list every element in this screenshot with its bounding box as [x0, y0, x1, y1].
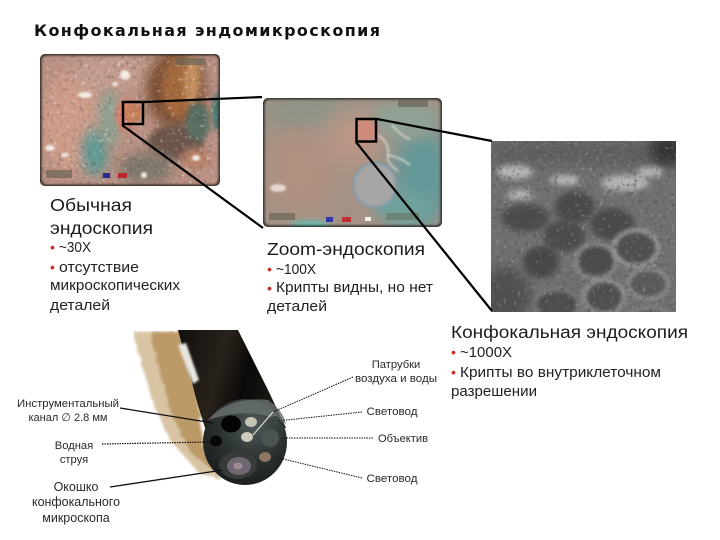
text block: confocal endoscopy: • — [451, 344, 456, 360]
label: air and water nozzles: воздуха и воды — [355, 373, 437, 385]
text block: standard endoscopy: • — [50, 239, 55, 255]
text block: confocal endoscopy: Крипты во внутриклеточном — [460, 365, 661, 381]
label: confocal window: микроскопа — [42, 511, 110, 525]
photo: endoscope tip — [133, 330, 287, 485]
text block: zoom endoscopy: • — [267, 280, 272, 296]
text block: zoom endoscopy: деталей — [267, 299, 327, 315]
text block: zoom endoscopy: Zoom-эндоскопия — [267, 239, 425, 259]
text block: standard endoscopy: микроскопических — [50, 278, 181, 294]
text block: standard endoscopy: отсутствие — [59, 260, 139, 276]
text block: zoom endoscopy: • — [267, 261, 272, 277]
label: water jet — [55, 440, 93, 466]
text block: standard endoscopy — [50, 195, 181, 314]
text block: standard endoscopy: ~30X — [59, 240, 91, 256]
label: water jet: Водная — [55, 440, 93, 452]
label: air and water nozzles: Патрубки — [372, 359, 420, 371]
label: air and water nozzles — [355, 359, 437, 385]
text block: standard endoscopy: Обычная — [50, 195, 132, 215]
light guides — [270, 416, 280, 424]
label: confocal window — [32, 480, 120, 525]
endoscope face — [203, 399, 287, 485]
text block: zoom endoscopy: Крипты видны, но нет — [276, 280, 433, 296]
instrument channel — [221, 416, 241, 432]
image: confocal micrograph — [491, 141, 676, 312]
air and water nozzles — [245, 417, 257, 427]
endoscope tube — [178, 330, 286, 428]
title: Конфокальная эндомикроскопия — [34, 21, 380, 40]
image: zoom endoscopy photo — [263, 98, 442, 227]
text block: confocal endoscopy — [451, 322, 688, 400]
text block: confocal endoscopy: Конфокальная эндоскопия — [451, 322, 688, 342]
text block: standard endoscopy: деталей — [50, 298, 110, 314]
confocal window — [219, 451, 257, 479]
label: confocal window: Окошко — [54, 480, 98, 494]
label: light guide upper: Световод — [366, 406, 418, 418]
text block: zoom endoscopy: ~100X — [276, 262, 316, 278]
label: water jet: струя — [60, 454, 88, 466]
label: instrument channel: Инструментальный — [17, 398, 119, 410]
objective lens — [261, 429, 279, 447]
fur background — [133, 331, 222, 480]
text block: standard endoscopy: эндоскопия — [50, 218, 153, 238]
water jet — [210, 436, 222, 446]
image: standard endoscopy photo — [40, 52, 221, 186]
label: light guide lower: Световод — [366, 473, 418, 485]
text block: confocal endoscopy: • — [451, 364, 456, 380]
text block: zoom endoscopy — [267, 239, 433, 315]
zoom square and connecting lines: standard to zoom — [122, 97, 263, 228]
zoom square and connecting lines: zoom to confocal — [356, 119, 492, 311]
text block: standard endoscopy: • — [50, 259, 55, 275]
label: confocal window: конфокального — [32, 495, 120, 509]
label: instrument channel: канал ∅ 2.8 мм — [28, 412, 108, 424]
label: instrument channel — [17, 398, 119, 424]
text block: confocal endoscopy: разрешении — [451, 384, 537, 400]
label: objective: Объектив — [378, 433, 428, 445]
callout lines — [102, 377, 373, 487]
text block: confocal endoscopy: ~1000X — [460, 345, 512, 361]
